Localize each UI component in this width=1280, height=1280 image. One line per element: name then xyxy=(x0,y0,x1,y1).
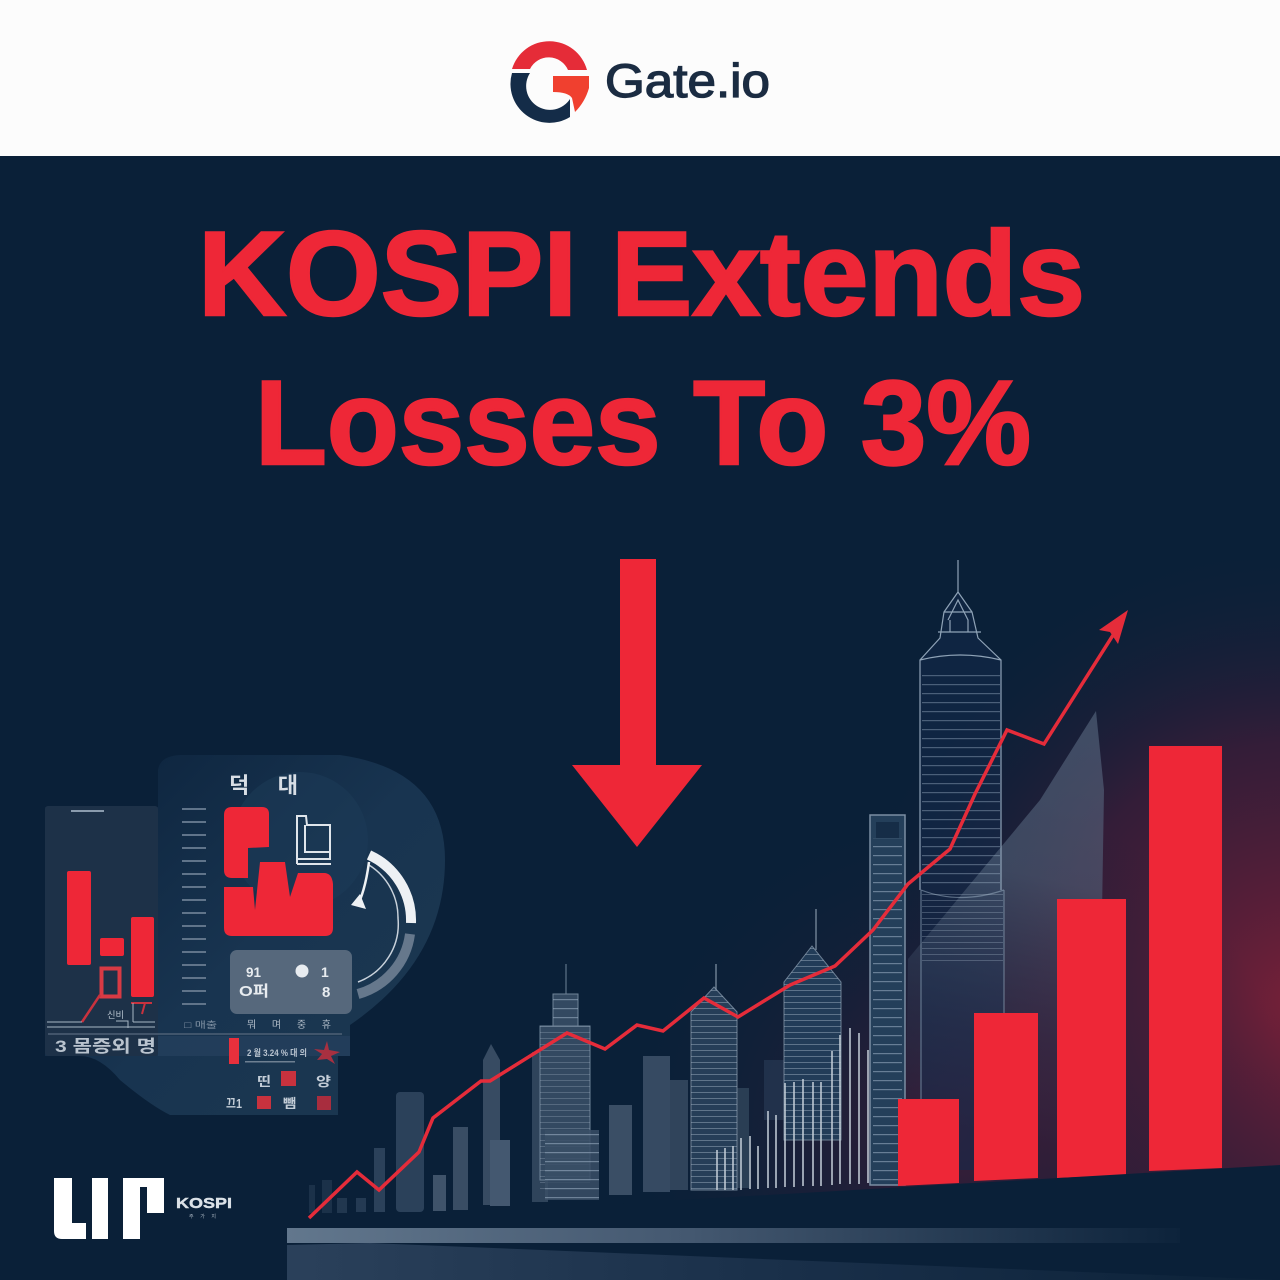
red glow backdrop xyxy=(610,560,1280,1200)
centre shading circle xyxy=(232,772,368,908)
skyline xyxy=(309,560,1104,1213)
outlined candle icon xyxy=(297,816,331,864)
floor slab xyxy=(287,1228,1180,1243)
row 3 end chip xyxy=(317,1096,331,1110)
rising red trend line xyxy=(309,610,1128,1218)
row 2 end text: 양 xyxy=(316,1074,331,1089)
big down arrow xyxy=(572,559,702,847)
dashboard panel xyxy=(45,755,445,1115)
stats digit lower: 8 xyxy=(322,984,330,1001)
stats digits right: 1 xyxy=(321,964,329,980)
title line 2: Losses To 3% xyxy=(255,356,1031,490)
title xyxy=(198,207,1085,490)
left chart card xyxy=(45,806,158,1056)
title line 1: KOSPI Extends xyxy=(198,207,1085,341)
stats text left: 91 xyxy=(246,964,261,980)
left chart baseline xyxy=(47,1003,155,1028)
bar 2 xyxy=(974,1013,1038,1181)
dashboard blob background xyxy=(45,755,445,1115)
logo sub caption: 주 가 지 xyxy=(189,1213,216,1220)
left candlesticks xyxy=(67,871,154,1022)
grey stats card xyxy=(230,950,352,1014)
big red block chart xyxy=(224,807,333,936)
building centre tower xyxy=(691,964,737,1190)
red star mark xyxy=(314,1041,340,1064)
logo wordmark: Gate.io xyxy=(605,54,770,107)
lower table strip xyxy=(158,1036,350,1056)
logo: Gate.io G mark xyxy=(510,41,589,123)
red row marker xyxy=(229,1038,239,1064)
small chart label: 신비 xyxy=(107,1010,124,1020)
white thin bars xyxy=(717,1028,878,1190)
row 3 text: 끄1 xyxy=(226,1096,242,1111)
table rows xyxy=(226,1071,331,1111)
list row lines xyxy=(182,808,206,1013)
table row underline xyxy=(245,1061,295,1062)
ground plane xyxy=(287,1165,1280,1280)
low background buildings xyxy=(309,1044,786,1213)
row 2 red chip xyxy=(281,1071,296,1086)
centre heading: 덕 대 xyxy=(229,773,298,798)
stats text lower: O퍼 xyxy=(239,983,269,1000)
tick labels under card: 뭐 며 중 휴 xyxy=(247,1019,331,1031)
red bar chart xyxy=(898,746,1222,1186)
panel divider xyxy=(48,1033,342,1035)
list row label: □ 매출 xyxy=(184,1020,217,1030)
row 3 middle text: 뺌 xyxy=(283,1096,296,1111)
header band xyxy=(0,0,1280,156)
left card caption: 3 몸증외 명 xyxy=(55,1037,156,1056)
bar 1 xyxy=(898,1099,959,1186)
building tall spire tower xyxy=(784,909,841,1140)
skyscraper floors xyxy=(922,668,1000,888)
skyscraper base floors xyxy=(922,892,1003,962)
lit rectangular tower xyxy=(870,815,905,1185)
bar 3 xyxy=(1057,899,1126,1178)
lower floor shade xyxy=(287,1243,1280,1280)
table row 1 text: 2 월 3.24 % 대 의 xyxy=(247,1047,307,1058)
bar 4 xyxy=(1149,746,1222,1171)
logo caption: KOSPI xyxy=(176,1195,232,1212)
bottom left logo xyxy=(54,1178,232,1239)
gauge xyxy=(351,855,411,994)
row 2 text: 띤 xyxy=(257,1074,271,1089)
trend arrow head xyxy=(1099,610,1128,644)
main skyscraper outline xyxy=(920,560,1004,1100)
logo blocks xyxy=(54,1178,164,1239)
stats flower mark xyxy=(296,964,308,978)
left card heading mark xyxy=(71,810,104,812)
building left lit tower xyxy=(540,964,599,1200)
main skyscraper fill xyxy=(920,592,1004,1170)
light beam xyxy=(905,711,1104,1170)
row 3 red chip xyxy=(257,1096,271,1109)
